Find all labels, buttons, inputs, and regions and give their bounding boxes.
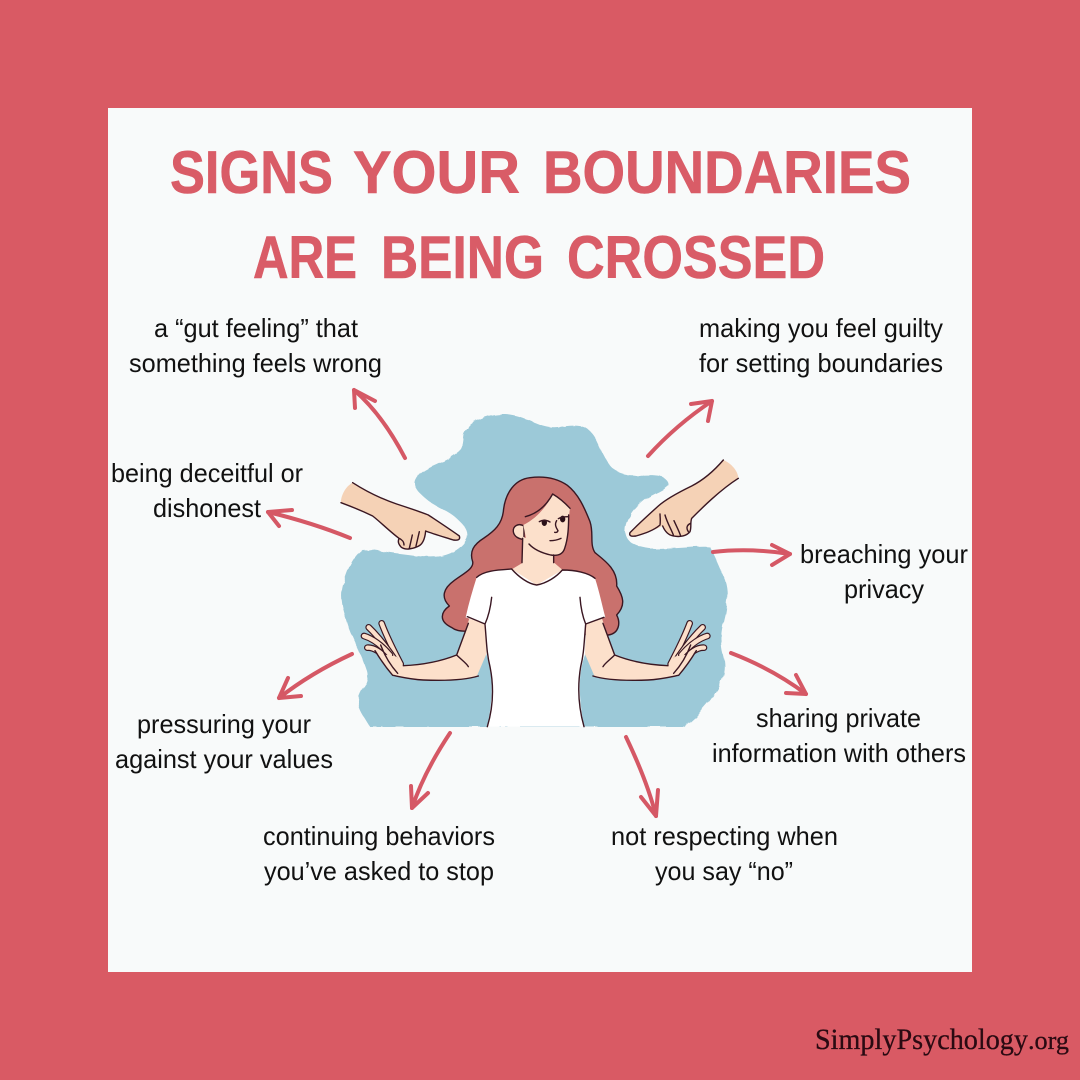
text: pressuring: against your values: [115, 746, 333, 774]
shirt: [466, 569, 605, 727]
text: deceitful: dishonest: [153, 495, 261, 523]
panel: main card: [108, 108, 972, 972]
eyes and brows: [539, 516, 568, 541]
right pointing hand: [630, 460, 738, 536]
arrow: continuing behaviors: [411, 733, 450, 808]
title: CROSSED: [567, 224, 825, 291]
title: SIGNS: [170, 139, 333, 206]
text: deceitful: being deceitful or: [111, 460, 303, 488]
text: breaching privacy: breaching your: [800, 541, 968, 569]
neck lines: [522, 538, 554, 563]
text: pressuring: [115, 711, 333, 774]
text: sharing private: [712, 705, 966, 768]
footer: source: SimplyPsychology: [815, 1023, 1028, 1056]
text: sharing private: sharing private: [756, 705, 921, 733]
panel strip below figure: [360, 727, 690, 733]
text: gut feeling: a “gut feeling” that: [154, 315, 358, 343]
face outline: [525, 494, 570, 555]
title: BOUNDARIES: [543, 139, 911, 206]
text: not respecting: not respecting when: [611, 823, 838, 851]
arrow: breaching privacy: [713, 545, 790, 565]
text: breaching privacy: [800, 541, 968, 604]
text: deceitful: [111, 460, 303, 523]
text: breaching privacy: privacy: [844, 576, 924, 604]
text: sharing private: information with others: [712, 740, 966, 768]
neck: [512, 537, 563, 585]
footer: source: .org: [1028, 1026, 1069, 1055]
text: pressuring: pressuring your: [137, 711, 311, 739]
left hand outline: [341, 483, 460, 549]
arrow: not respecting no: [626, 737, 658, 816]
text: continuing behaviors: continuing behaviors: [263, 823, 495, 851]
text: gut feeling: something feels wrong: [129, 350, 382, 378]
text: continuing behaviors: you’ve asked to stop: [264, 858, 494, 886]
arrow: making guilty: [648, 401, 712, 456]
arrow: sharing private: [731, 653, 806, 694]
title: YOUR: [353, 139, 520, 206]
text: not respecting: [611, 823, 838, 886]
title: [170, 139, 911, 291]
arrow: pressuring: [279, 654, 352, 698]
arrow: gut feeling: [354, 390, 405, 458]
face: [523, 494, 570, 555]
right hand outline: [630, 460, 738, 536]
hair: [442, 477, 623, 635]
text: making guilty: for setting boundaries: [699, 350, 943, 378]
text: not respecting: you say “no”: [655, 858, 793, 886]
ear: [513, 525, 524, 539]
title: ARE: [253, 224, 357, 291]
text: continuing behaviors: [263, 823, 495, 886]
text: making guilty: [699, 315, 943, 378]
text: making guilty: making you feel guilty: [699, 315, 943, 343]
text: gut feeling: [129, 315, 382, 378]
left pointing hand: [341, 483, 460, 549]
illustration: woman with pointing hands: [341, 414, 738, 733]
shirt outline: [467, 569, 604, 727]
arm right: [585, 617, 707, 680]
blue torn paper background: [342, 414, 727, 727]
arm left: [364, 617, 487, 680]
arrow: deceitful: [268, 510, 350, 538]
title: BEING: [381, 224, 544, 291]
